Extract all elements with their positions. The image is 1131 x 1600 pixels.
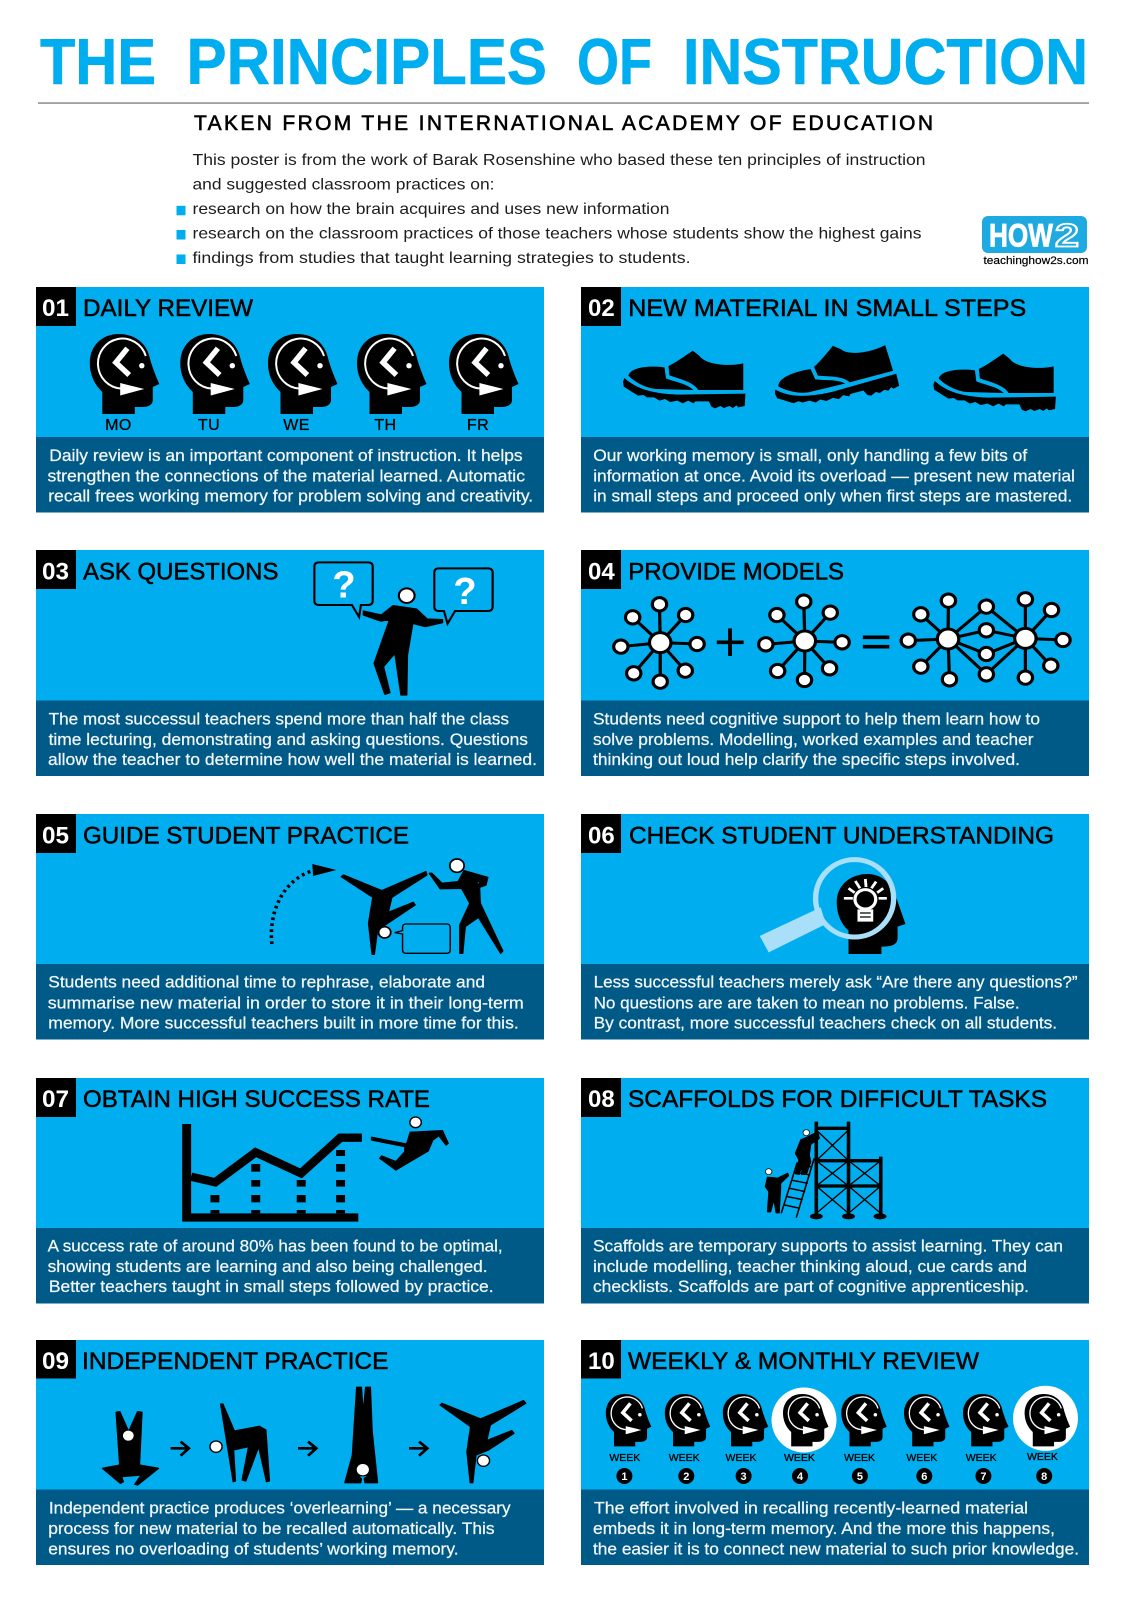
description 01: recall frees working memory for problem solving and creativity. <box>48 487 533 506</box>
description 02 <box>593 446 1075 506</box>
description 04: solve problems. Modelling, worked examples and teacher <box>593 730 1034 749</box>
heading 10: WEEKLY & MONTHLY REVIEW <box>628 1348 979 1375</box>
heading 06: 06 <box>588 822 615 849</box>
description 06: No questions are are taken to mean no problems. False. <box>594 994 1020 1013</box>
icon: eight heads with week labels: WEEK <box>844 1452 875 1464</box>
description 05 <box>48 973 524 1033</box>
icon: eight heads with week labels: WEEK <box>906 1452 937 1464</box>
description 04 <box>593 709 1040 769</box>
description 05: memory. More successful teachers built in more time for this. <box>48 1014 519 1033</box>
description 10: the easier it is to connect new material to such prior knowledge. <box>593 1539 1079 1558</box>
description 08: checklists. Scaffolds are part of cognitive apprenticeship. <box>593 1277 1029 1296</box>
panel: 03 ask questions <box>36 550 544 776</box>
title: INSTRUCTION <box>683 25 1088 98</box>
icon: eight heads with week labels: WEEK <box>726 1452 756 1464</box>
heading 01: DAILY REVIEW <box>83 295 253 322</box>
heading 09: INDEPENDENT PRACTICE <box>82 1348 388 1375</box>
icon: eight heads with week labels: WEEK <box>1027 1451 1058 1463</box>
description 10 <box>593 1498 1079 1558</box>
logo: HOW2: teachinghow2s.com <box>984 255 1088 267</box>
description 04: thinking out loud help clarify the specific steps involved. <box>593 750 1020 769</box>
description 03 <box>48 709 537 769</box>
icon: teacher with question bubbles: ? <box>453 571 477 613</box>
icon: eight heads with week labels: 1 <box>621 1471 627 1483</box>
description 07: A success rate of around 80% has been found to be optimal, <box>48 1237 503 1256</box>
panel: 09 independent practice <box>36 1340 544 1565</box>
intro text: This poster is from the work of Barak Rosenshine who based these ten principles of instruction <box>192 152 926 169</box>
description 03: The most successul teachers spend more than half the class <box>49 709 509 728</box>
panel: 07 obtain high success rate <box>36 1078 544 1304</box>
intro text: and suggested classroom practices on: <box>192 176 494 193</box>
icon: five heads with day labels: TU <box>198 417 220 434</box>
icon: eight heads with week labels: 8 <box>1041 1471 1047 1483</box>
icon: five heads with day labels: MO <box>105 417 132 434</box>
heading 05: GUIDE STUDENT PRACTICE <box>83 822 409 849</box>
icon: five heads with day labels: TH <box>374 417 396 434</box>
description 03: allow the teacher to determine how well the material is learned. <box>48 750 537 769</box>
bullet list: research on how the brain acquires and uses new information <box>192 201 670 218</box>
panel: 08 scaffolds for difficult tasks <box>581 1078 1089 1304</box>
icon: eight heads with week labels: 6 <box>921 1471 927 1483</box>
panel: 10 weekly and monthly review <box>581 1340 1089 1565</box>
icon: teacher with question bubbles: ? <box>332 565 356 607</box>
description 05: summarise new material in order to store it in their long-term <box>48 994 524 1013</box>
icon: eight heads with week labels: WEEK <box>966 1452 997 1464</box>
icon: five heads with day labels: FR <box>467 417 489 434</box>
icon: magnifying glass over head with lightbulb <box>760 860 905 954</box>
panel: 01 daily review <box>36 287 544 512</box>
panel: 04 provide models <box>581 550 1089 776</box>
icon: teacher guiding student handstand <box>271 859 503 954</box>
description 05: Students need additional time to rephrase, elaborate and <box>48 973 485 992</box>
intro text <box>176 152 926 267</box>
description 08: include modelling, teacher thinking aloud, cue cards and <box>593 1257 1027 1276</box>
heading 03: 03 <box>42 559 69 586</box>
logo: HOW2 <box>982 216 1088 267</box>
icon: five heads with day labels: WE <box>283 417 310 434</box>
panel: 02 new material in small steps <box>581 287 1089 512</box>
heading 02: 02 <box>588 295 615 322</box>
description 02: Our working memory is small, only handling a few bits of <box>593 446 1027 465</box>
title: OF <box>577 25 652 98</box>
description 06: By contrast, more successful teachers check on all students. <box>594 1014 1057 1033</box>
icon: teacher with question bubbles <box>314 562 493 695</box>
heading 07: OBTAIN HIGH SUCCESS RATE <box>83 1086 430 1113</box>
icon: eight heads with week labels: WEEK <box>669 1452 700 1464</box>
description 01: Daily review is an important component of instruction. It helps <box>49 446 523 465</box>
heading 03: ASK QUESTIONS <box>83 559 278 586</box>
description 08: Scaffolds are temporary supports to assist learning. They can <box>593 1237 1063 1256</box>
bullet list: findings from studies that taught learning strategies to students. <box>192 250 690 267</box>
description 01 <box>48 446 533 506</box>
description 04: Students need cognitive support to help them learn how to <box>593 709 1040 728</box>
description 09: Independent practice produces ‘overlearning’ — a necessary <box>49 1498 511 1517</box>
icon: four handstand stages with arrows <box>103 1387 526 1485</box>
logo: HOW2: HOW <box>989 218 1054 254</box>
bullet list: research on the classroom practices of those teachers whose students show the highest gains <box>192 226 922 243</box>
bullet list <box>176 201 922 267</box>
heading 01: 01 <box>42 295 69 322</box>
icon: eight heads with week labels: WEEK <box>784 1452 815 1464</box>
icon: line chart with leaping figure <box>182 1117 448 1222</box>
heading 07: 07 <box>42 1086 69 1113</box>
icon: eight heads with week labels: 3 <box>741 1471 747 1483</box>
icon: three shoes <box>623 332 1056 419</box>
panel: 05 guide student practice <box>36 814 544 1040</box>
description 02: in small steps and proceed only when first steps are mastered. <box>593 487 1072 506</box>
icon: five heads with day labels <box>90 334 519 434</box>
description 06 <box>594 973 1078 1033</box>
title <box>40 25 1088 98</box>
panel: 06 check student understanding <box>581 814 1089 1040</box>
description 07 <box>48 1237 503 1296</box>
heading 04: PROVIDE MODELS <box>628 559 844 586</box>
title: THE <box>40 25 156 98</box>
logo: HOW2: 2 <box>1055 218 1079 254</box>
heading 04: 04 <box>588 559 615 586</box>
heading 02: NEW MATERIAL IN SMALL STEPS <box>628 295 1026 322</box>
icon: eight heads with week labels: 4 <box>797 1471 804 1483</box>
description 01: strengthen the connections of the material learned. Automatic <box>48 466 526 485</box>
icon: eight heads with week labels: 5 <box>857 1471 863 1483</box>
icon: eight heads with week labels <box>606 1386 1078 1484</box>
heading 05: 05 <box>42 822 69 849</box>
icon: eight heads with week labels: 7 <box>980 1471 986 1483</box>
description 09 <box>48 1498 511 1558</box>
description 10: The effort involved in recalling recently-learned material <box>594 1498 1028 1517</box>
description 06: Less successful teachers merely ask “Are there any questions?” <box>594 973 1078 992</box>
icon: scaffold with ladder and two workers <box>765 1122 886 1219</box>
description 07: showing students are learning and also being challenged. <box>48 1257 488 1276</box>
description 09: ensures no overloading of students’ working memory. <box>48 1539 459 1558</box>
icon: network diagrams <box>614 593 1070 688</box>
heading 08: SCAFFOLDS FOR DIFFICULT TASKS <box>628 1086 1047 1113</box>
description 08 <box>593 1237 1063 1296</box>
description 03: time lecturing, demonstrating and asking questions. Questions <box>49 730 528 749</box>
description 09: process for new material to be recalled automatically. This <box>48 1519 495 1538</box>
icon: eight heads with week labels: WEEK <box>609 1452 640 1464</box>
title: PRINCIPLES <box>186 25 547 98</box>
subtitle: TAKEN FROM THE INTERNATIONAL ACADEMY OF EDUCATION <box>194 112 933 135</box>
heading 06: CHECK STUDENT UNDERSTANDING <box>629 822 1054 849</box>
heading 10: 10 <box>588 1348 615 1375</box>
icon: eight heads with week labels: 2 <box>683 1471 689 1483</box>
description 10: embeds it in long-term memory. And the more this happens, <box>593 1519 1055 1538</box>
description 02: information at once. Avoid its overload — present new material <box>593 466 1075 485</box>
description 07: Better teachers taught in small steps followed by practice. <box>49 1277 494 1296</box>
heading 08: 08 <box>588 1086 615 1113</box>
heading 09: 09 <box>42 1348 69 1375</box>
